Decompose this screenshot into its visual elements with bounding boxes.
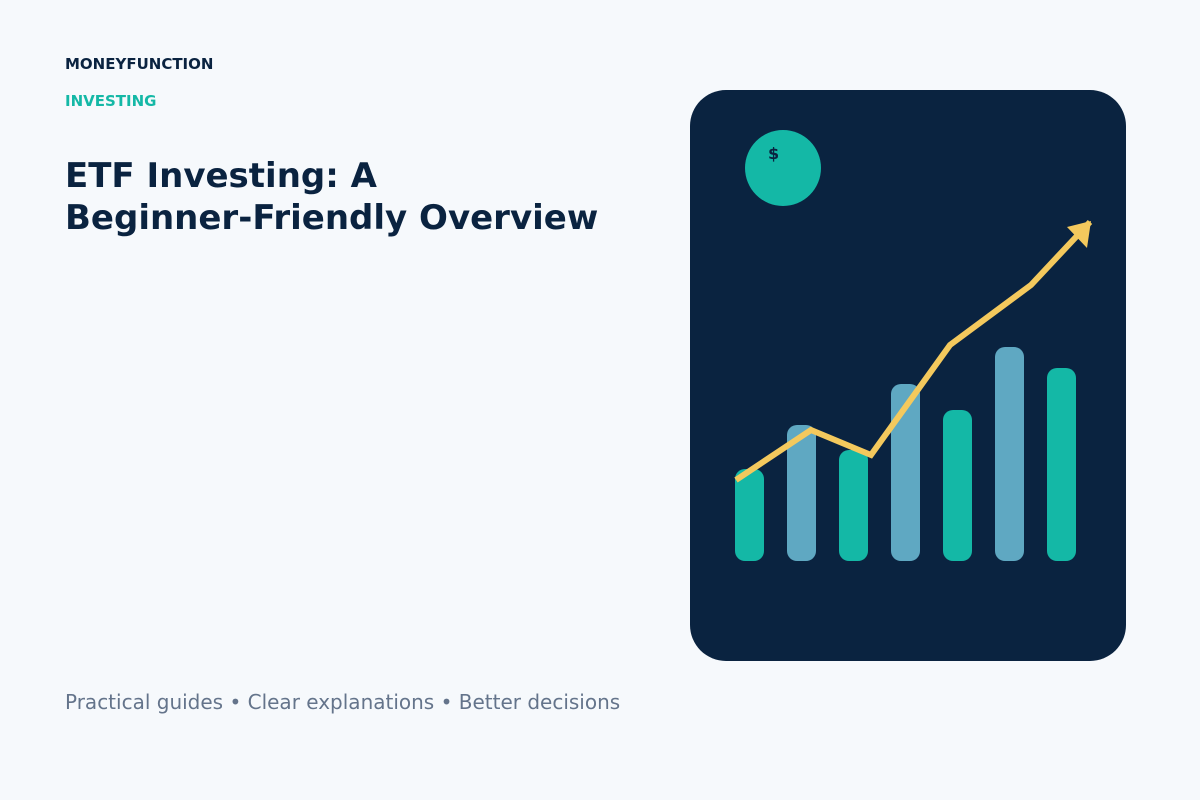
icon: dollar coin: [745, 130, 821, 206]
category label: INVESTING: [65, 92, 156, 110]
tagline: Practical guides • Clear explanations • Better decisions: [65, 690, 620, 714]
panel: chart illustration: [690, 90, 1126, 661]
icon: dollar coin: $: [768, 144, 779, 163]
title: ETF Investing: A: [65, 156, 378, 196]
brand name: MONEYFUNCTION: [65, 55, 213, 73]
title: [65, 156, 598, 238]
trend line arrow: [736, 221, 1091, 480]
title: Beginner-Friendly Overview: [65, 198, 598, 238]
bar chart: [735, 347, 1076, 561]
